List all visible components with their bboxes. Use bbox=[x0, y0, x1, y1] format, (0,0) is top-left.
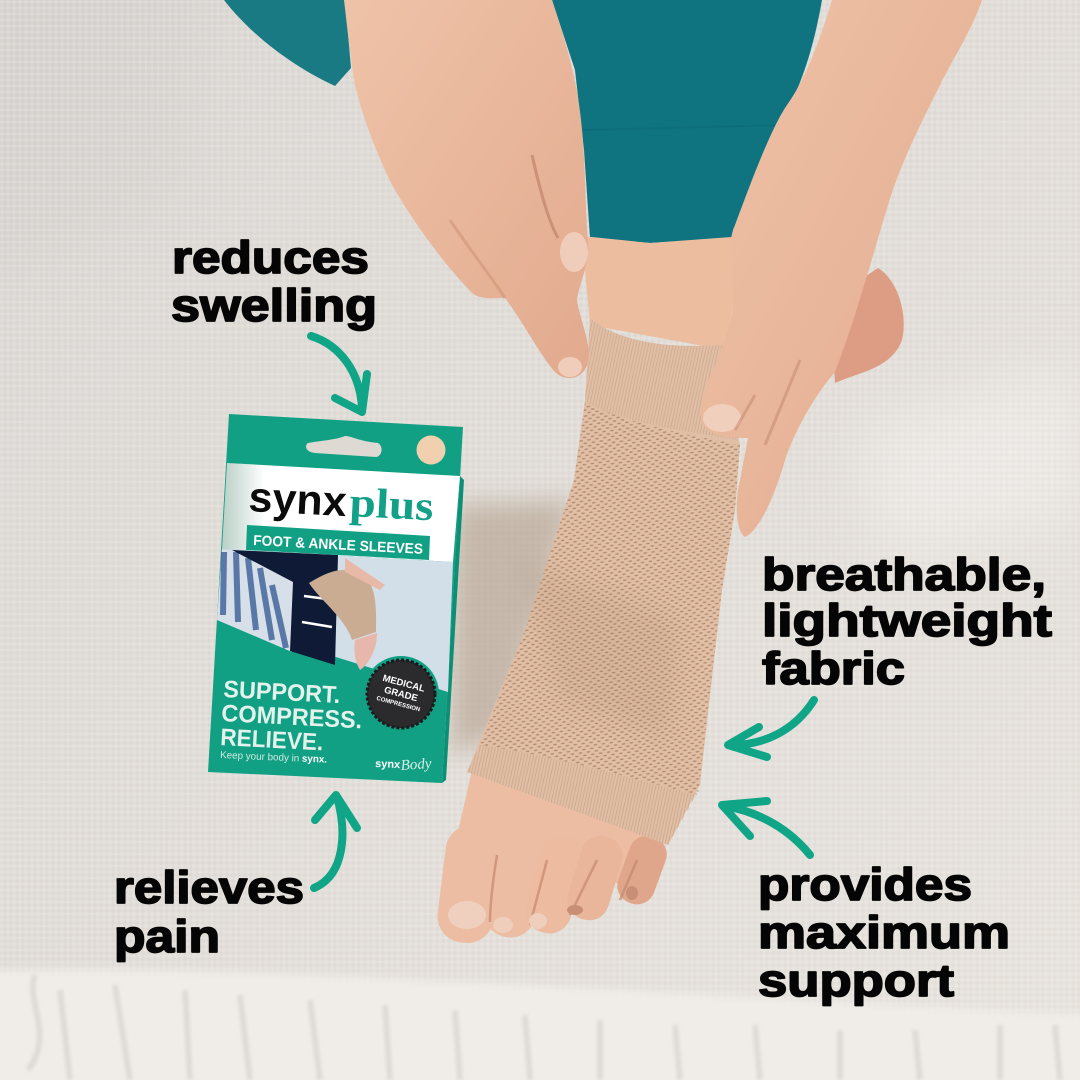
compression sleeve on foot bbox=[467, 318, 740, 845]
callout: provides maximum support bbox=[758, 859, 1010, 1006]
callout: breathable, lightweight fabric: fabric bbox=[762, 643, 905, 694]
photo on the box bbox=[217, 549, 453, 692]
shadow behind product box and foot bbox=[450, 500, 575, 755]
callout: relieves pain bbox=[114, 862, 304, 962]
product box bbox=[208, 414, 464, 783]
callout: breathable, lightweight fabric: lightweight bbox=[762, 595, 1052, 646]
brand mark: synx bbox=[375, 758, 401, 771]
heel behind right hand bbox=[830, 268, 904, 383]
left hand pulling the sleeve bbox=[344, 0, 589, 378]
brand mark: Body bbox=[400, 756, 432, 774]
callout: provides maximum support: support bbox=[758, 955, 954, 1006]
arrow: to sleeve hem bbox=[722, 801, 810, 855]
colour swatch bbox=[416, 436, 446, 464]
logo: synxplus: plus bbox=[348, 480, 435, 530]
callout: relieves pain: relieves bbox=[114, 862, 304, 913]
bare ankle bbox=[582, 236, 745, 350]
callout: provides maximum support: maximum bbox=[758, 907, 1010, 958]
callout: breathable, lightweight fabric: breathable, bbox=[762, 549, 1046, 600]
callout: reduces swelling: swelling bbox=[171, 280, 377, 331]
callout: reduces swelling: reduces bbox=[172, 232, 369, 283]
callout: relieves pain: pain bbox=[114, 911, 220, 962]
box side edge bbox=[442, 476, 464, 783]
white logo panel bbox=[222, 463, 460, 562]
medical grade badge: GRADE bbox=[383, 685, 419, 704]
slogan: RELIEVE. bbox=[220, 724, 324, 756]
medical grade badge: MEDICAL bbox=[381, 673, 426, 695]
slogan: COMPRESS. bbox=[221, 700, 363, 734]
product name banner: FOOT & ANKLE SLEEVES bbox=[253, 533, 424, 558]
slogan: SUPPORT. bbox=[223, 676, 341, 709]
callout: reduces swelling bbox=[171, 232, 377, 331]
bare foot with toes bbox=[435, 770, 680, 946]
left sleeve of teal sweater bbox=[224, 0, 351, 86]
arrow: to box bottom bbox=[314, 795, 357, 888]
medical grade badge: COMPRESSION bbox=[376, 696, 421, 713]
logo: synxplus: synx bbox=[248, 473, 349, 525]
right hand and forearm bbox=[701, 0, 982, 537]
brand mark bbox=[375, 756, 432, 774]
logo: synxplus bbox=[248, 473, 435, 530]
box green body bbox=[208, 414, 463, 783]
product name banner bbox=[246, 525, 430, 560]
arrow: to box top bbox=[311, 336, 367, 412]
arrow: to sleeve mesh bbox=[728, 700, 814, 757]
callout: breathable, lightweight fabric bbox=[762, 549, 1052, 694]
hang hole bbox=[306, 436, 382, 457]
teal trouser leg bbox=[552, 0, 822, 243]
medical grade badge bbox=[363, 656, 439, 732]
slogan bbox=[220, 676, 363, 756]
callout: provides maximum support: provides bbox=[758, 859, 972, 910]
tagline: Keep your body in synx. bbox=[220, 750, 327, 766]
